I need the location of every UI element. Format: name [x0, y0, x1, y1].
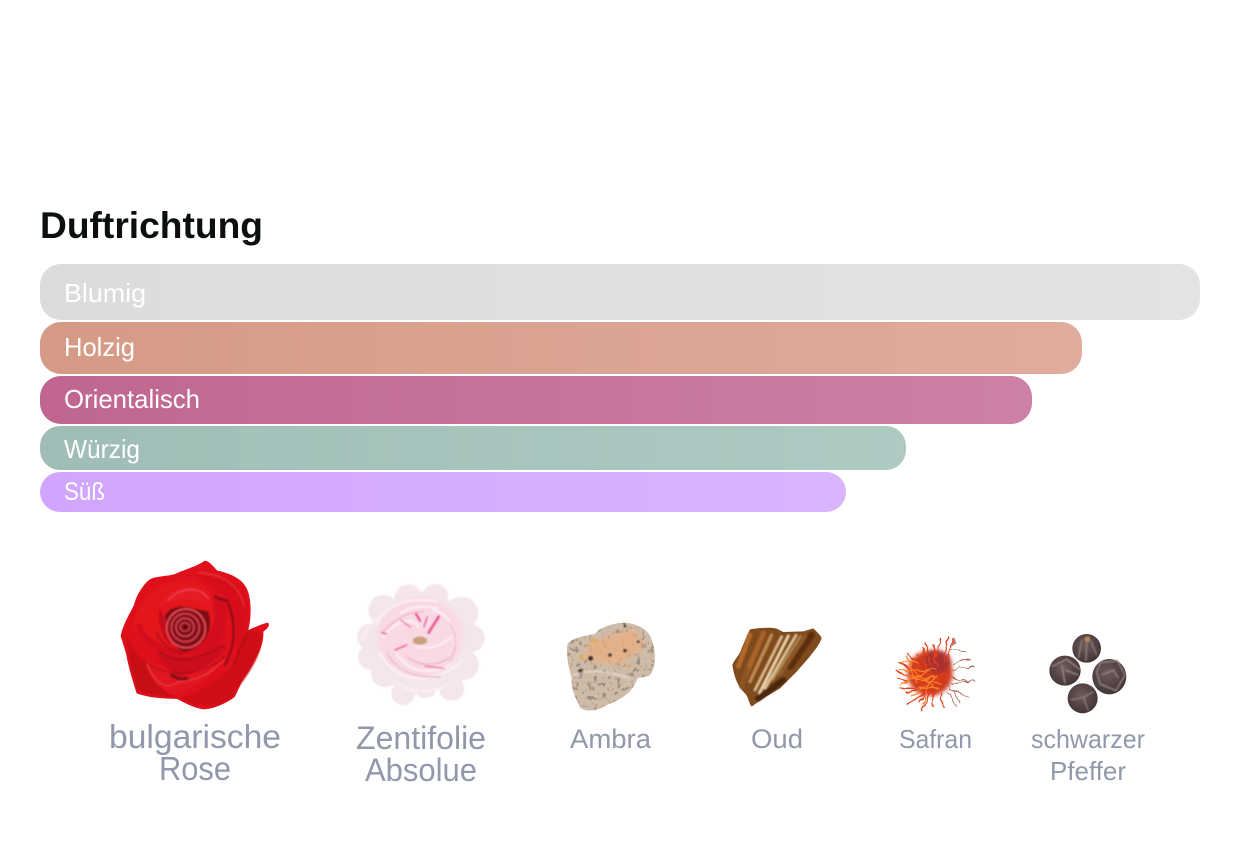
icon: Oud [732, 628, 822, 707]
label: Oud: Oud [751, 724, 803, 754]
bar: Orientalisch: Orientalisch [64, 384, 200, 414]
bar: Orientalisch [40, 376, 1032, 424]
rose centre spiral [165, 607, 210, 652]
rose shadows [145, 597, 248, 679]
icon: Safran [897, 637, 975, 712]
bar: Würzig: Würzig [64, 434, 140, 464]
saffron core [907, 651, 953, 696]
label: bulgarische Rose: Rose [159, 750, 231, 787]
flower petals [363, 600, 463, 691]
label: bulgarische Rose [109, 718, 281, 787]
peppercorn top [1072, 634, 1101, 663]
flower heart [413, 637, 427, 645]
label: Zentifolie Absolue: Zentifolie [356, 720, 486, 756]
label: schwarzer Pfeffer: Pfeffer [1050, 756, 1126, 786]
icon: bulgarische Rose [121, 561, 269, 709]
icon: schwarzer Pfeffer [1049, 634, 1126, 713]
icon: Ambra [567, 623, 655, 711]
bar: Holzig: Holzig [64, 332, 135, 362]
rose highlights [147, 573, 244, 686]
bar: Würzig [40, 426, 906, 470]
label: bulgarische Rose: bulgarische [109, 718, 281, 755]
label: Zentifolie Absolue [356, 720, 486, 788]
label: schwarzer Pfeffer [1031, 724, 1145, 786]
label: Zentifolie Absolue: Absolue [365, 752, 477, 788]
heading: Duftrichtung: Duftrichtung [40, 205, 263, 246]
label: Safran: Safran [899, 724, 972, 754]
bar: Süß [40, 472, 846, 512]
peppercorn left [1049, 656, 1081, 686]
bar chart: Duftrichtung [40, 264, 1200, 512]
label: Ambra: Ambra [570, 724, 652, 754]
icon: Zentifolie Absolue [357, 584, 485, 705]
bar: Süß: Süß [64, 478, 105, 506]
bar: Holzig [40, 322, 1082, 374]
peppercorn bottom [1068, 683, 1098, 713]
peppercorn right [1092, 659, 1126, 694]
bar: Blumig [40, 264, 1200, 320]
label: schwarzer Pfeffer: schwarzer [1031, 724, 1145, 754]
bar: Blumig: Blumig [64, 278, 146, 308]
